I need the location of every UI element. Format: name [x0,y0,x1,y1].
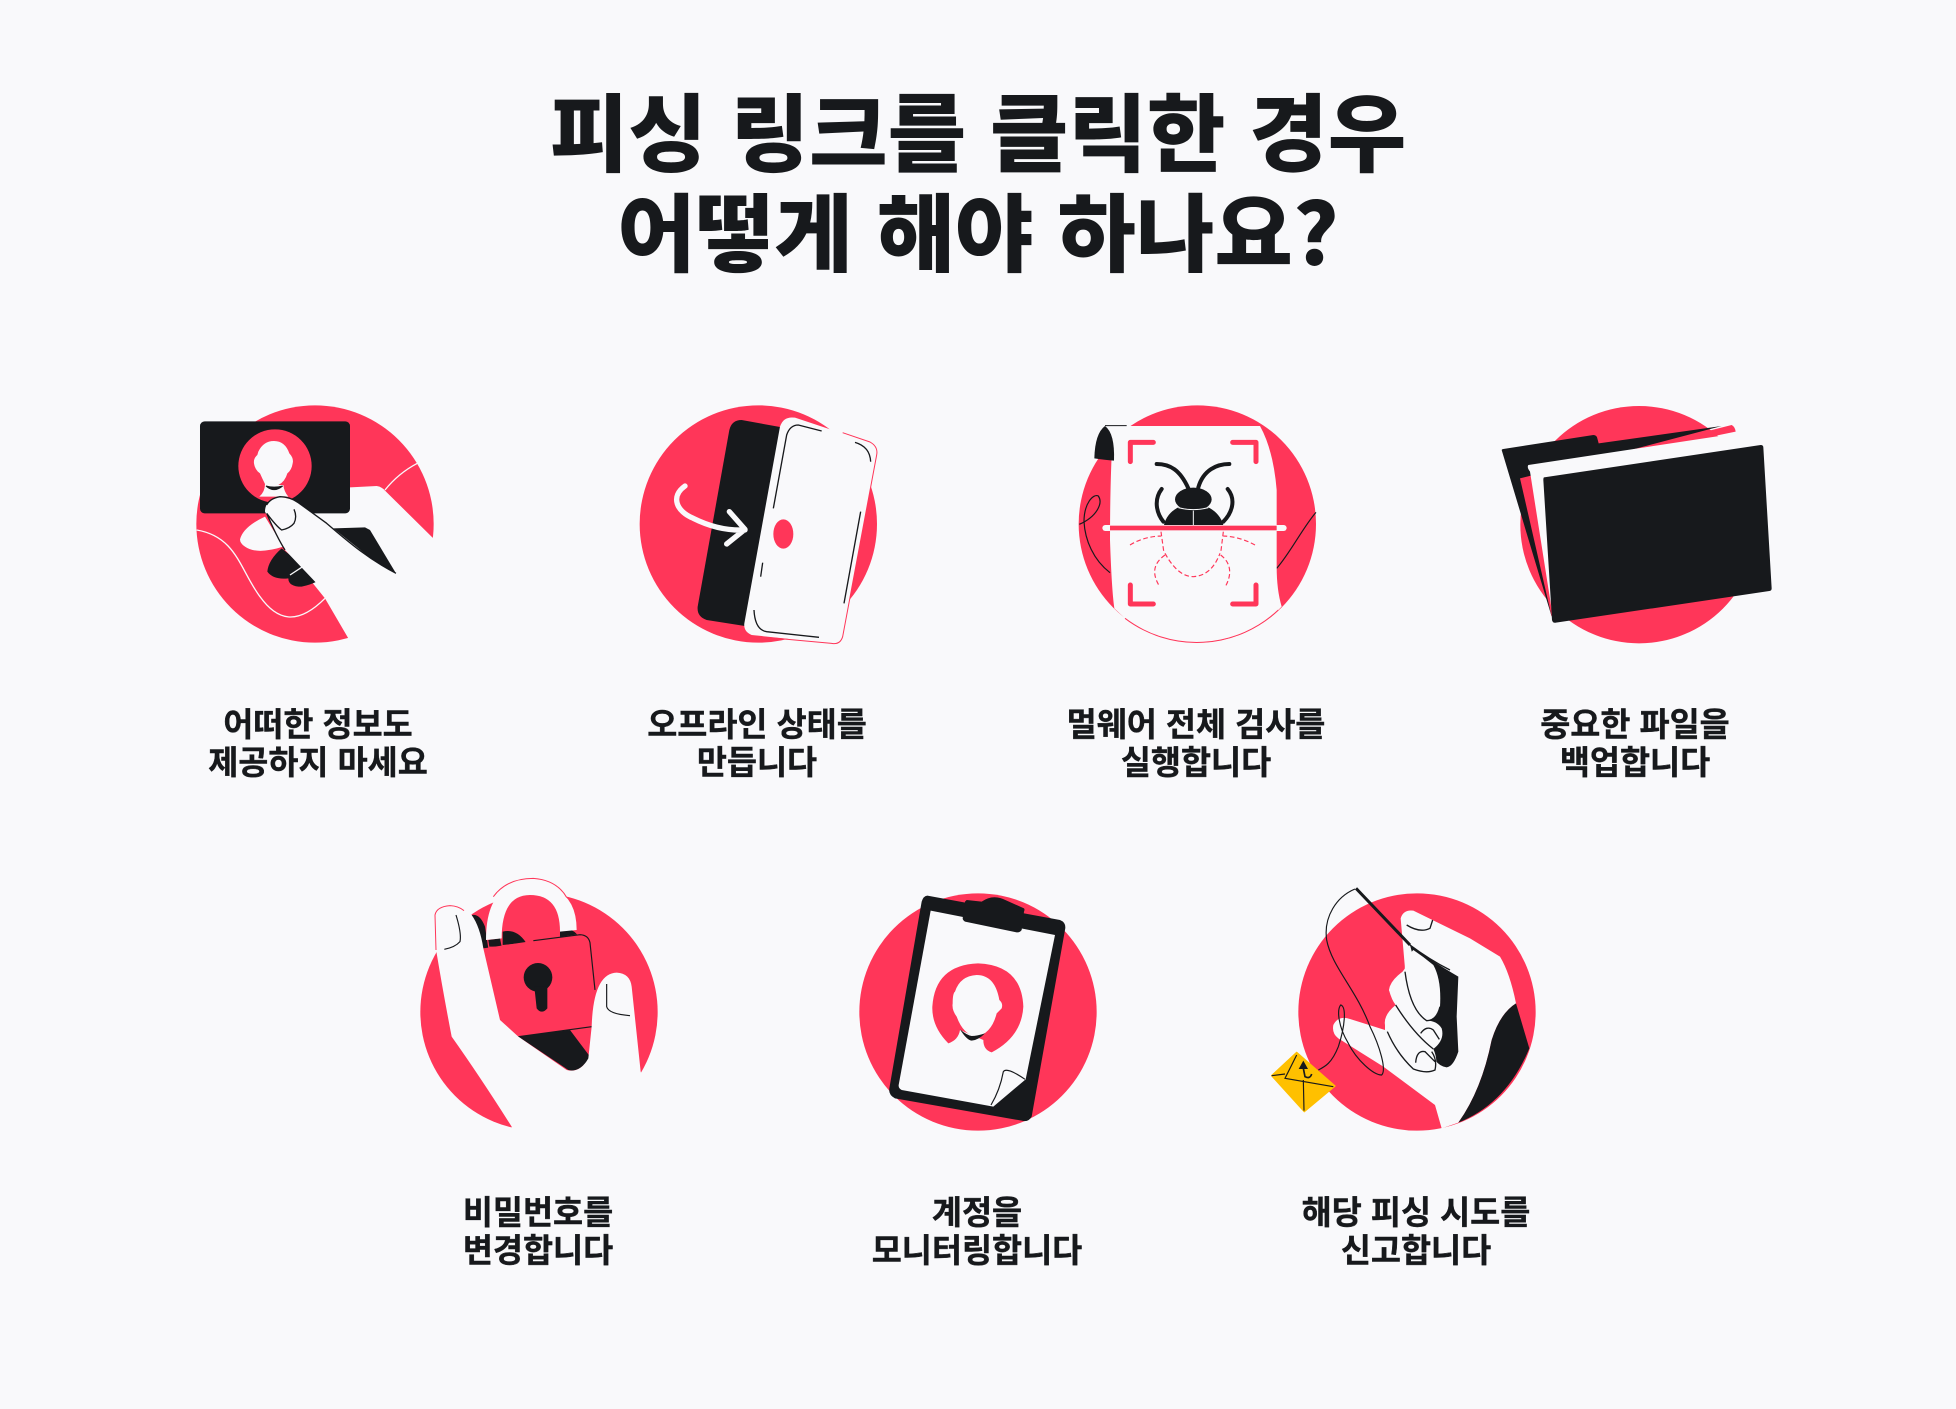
label: provide no information [208,706,428,780]
label: back up files: 백업합니다 [1560,744,1710,780]
label: report phishing attempt [1302,1194,1530,1268]
title [550,66,1406,290]
icon: malware scan of a bug [1079,405,1316,643]
label: monitor accounts: 모니터링합니다 [872,1232,1082,1268]
icon: hand holding ID card [196,405,457,650]
label: provide no information: 어떠한 정보도 [223,706,413,743]
label: run malware scan: 멀웨어 전체 검사를 [1067,706,1325,743]
label: monitor accounts: 계정을 [932,1194,1022,1231]
label: go offline [647,706,867,780]
title: 피싱 링크를 클릭한 경우 [550,66,1406,190]
icon: hand holding padlock [420,878,663,1140]
label: report phishing attempt: 신고합니다 [1341,1232,1491,1268]
label: back up files: 중요한 파일을 [1540,706,1730,743]
label: change passwords: 변경합니다 [463,1232,613,1268]
label: change passwords [463,1194,613,1268]
icon: clipboard with profile [859,893,1097,1131]
title: 어떻게 해야 하나요? [617,166,1339,290]
icon: hand with fishing line and envelope [1272,888,1536,1131]
icon: backup file folder [1502,406,1772,643]
label: go offline: 만듭니다 [697,744,817,780]
label: go offline: 오프라인 상태를 [647,706,867,743]
label: change passwords: 비밀번호를 [463,1194,613,1231]
label: provide no information: 제공하지 마세요 [208,744,428,780]
label: monitor accounts [872,1194,1082,1268]
icon: phone flipped over [640,405,877,644]
label: back up files [1540,706,1730,780]
label: run malware scan: 실행합니다 [1121,744,1271,780]
label: run malware scan [1067,706,1325,780]
label: report phishing attempt: 해당 피싱 시도를 [1302,1194,1530,1231]
